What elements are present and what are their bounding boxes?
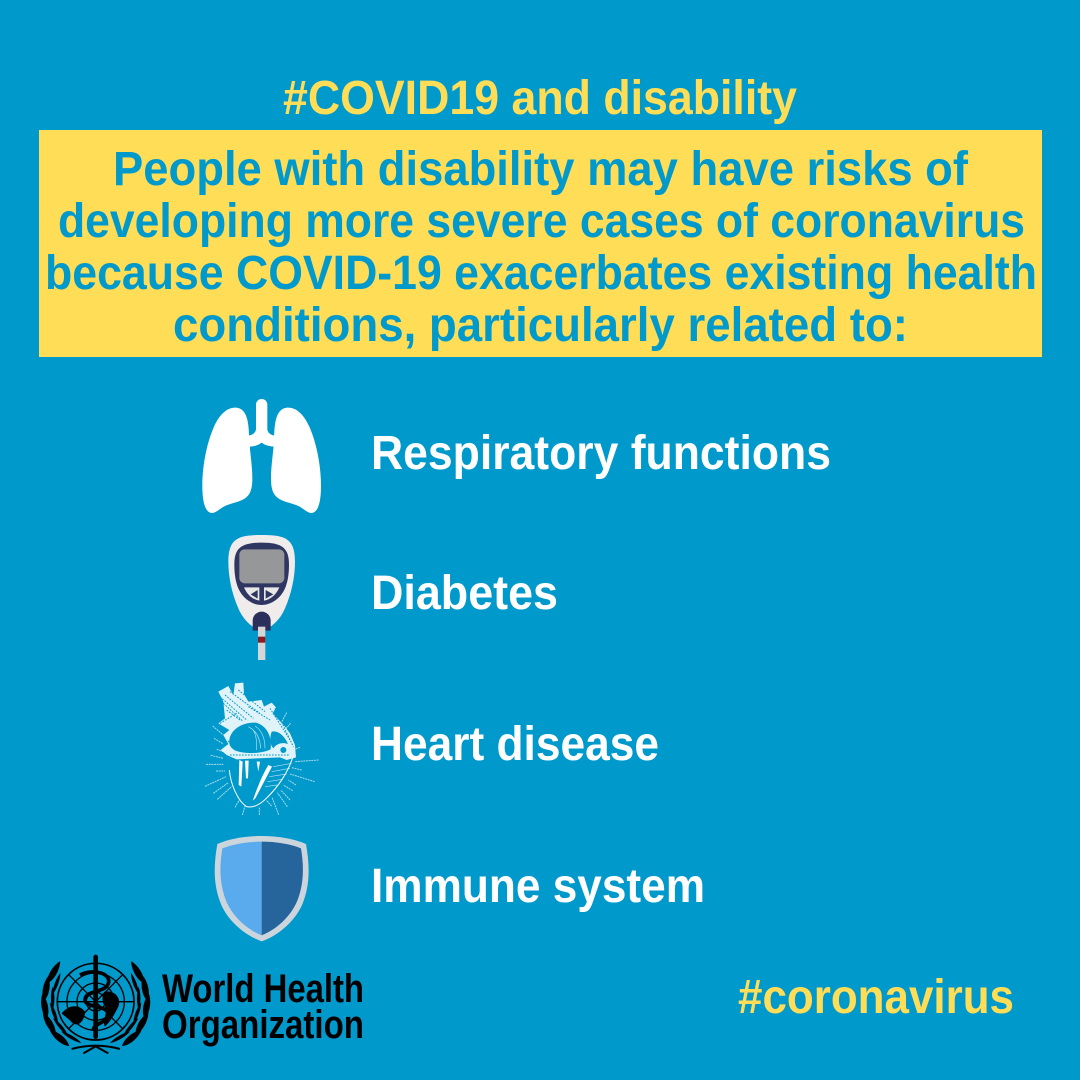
hashtag: #coronavirus bbox=[738, 971, 1014, 1024]
list item: respiratory functions: Respiratory functions bbox=[371, 427, 831, 480]
icon: shield bbox=[215, 836, 309, 941]
logo: World Health Organization bbox=[39, 957, 364, 1053]
icon: anatomical heart bbox=[205, 683, 319, 815]
logo: World Health Organization: Organization bbox=[162, 1003, 364, 1047]
list item: heart disease: Heart disease bbox=[371, 718, 659, 771]
list item: immune system: Immune system bbox=[371, 860, 705, 913]
panel: key message: developing more severe cases of coronavirus bbox=[58, 195, 1025, 248]
panel: key message bbox=[39, 130, 1042, 357]
panel: key message: conditions, particularly related to: bbox=[173, 299, 908, 352]
list item: diabetes: Diabetes bbox=[371, 567, 558, 620]
icon: WHO emblem bbox=[39, 957, 152, 1053]
icon: glucose meter bbox=[228, 535, 295, 660]
panel: key message: People with disability may have risks of bbox=[113, 143, 969, 196]
logo: World Health Organization: World Health bbox=[162, 967, 364, 1011]
icon: lungs bbox=[202, 399, 321, 513]
title: #COVID19 and disability bbox=[283, 72, 797, 125]
